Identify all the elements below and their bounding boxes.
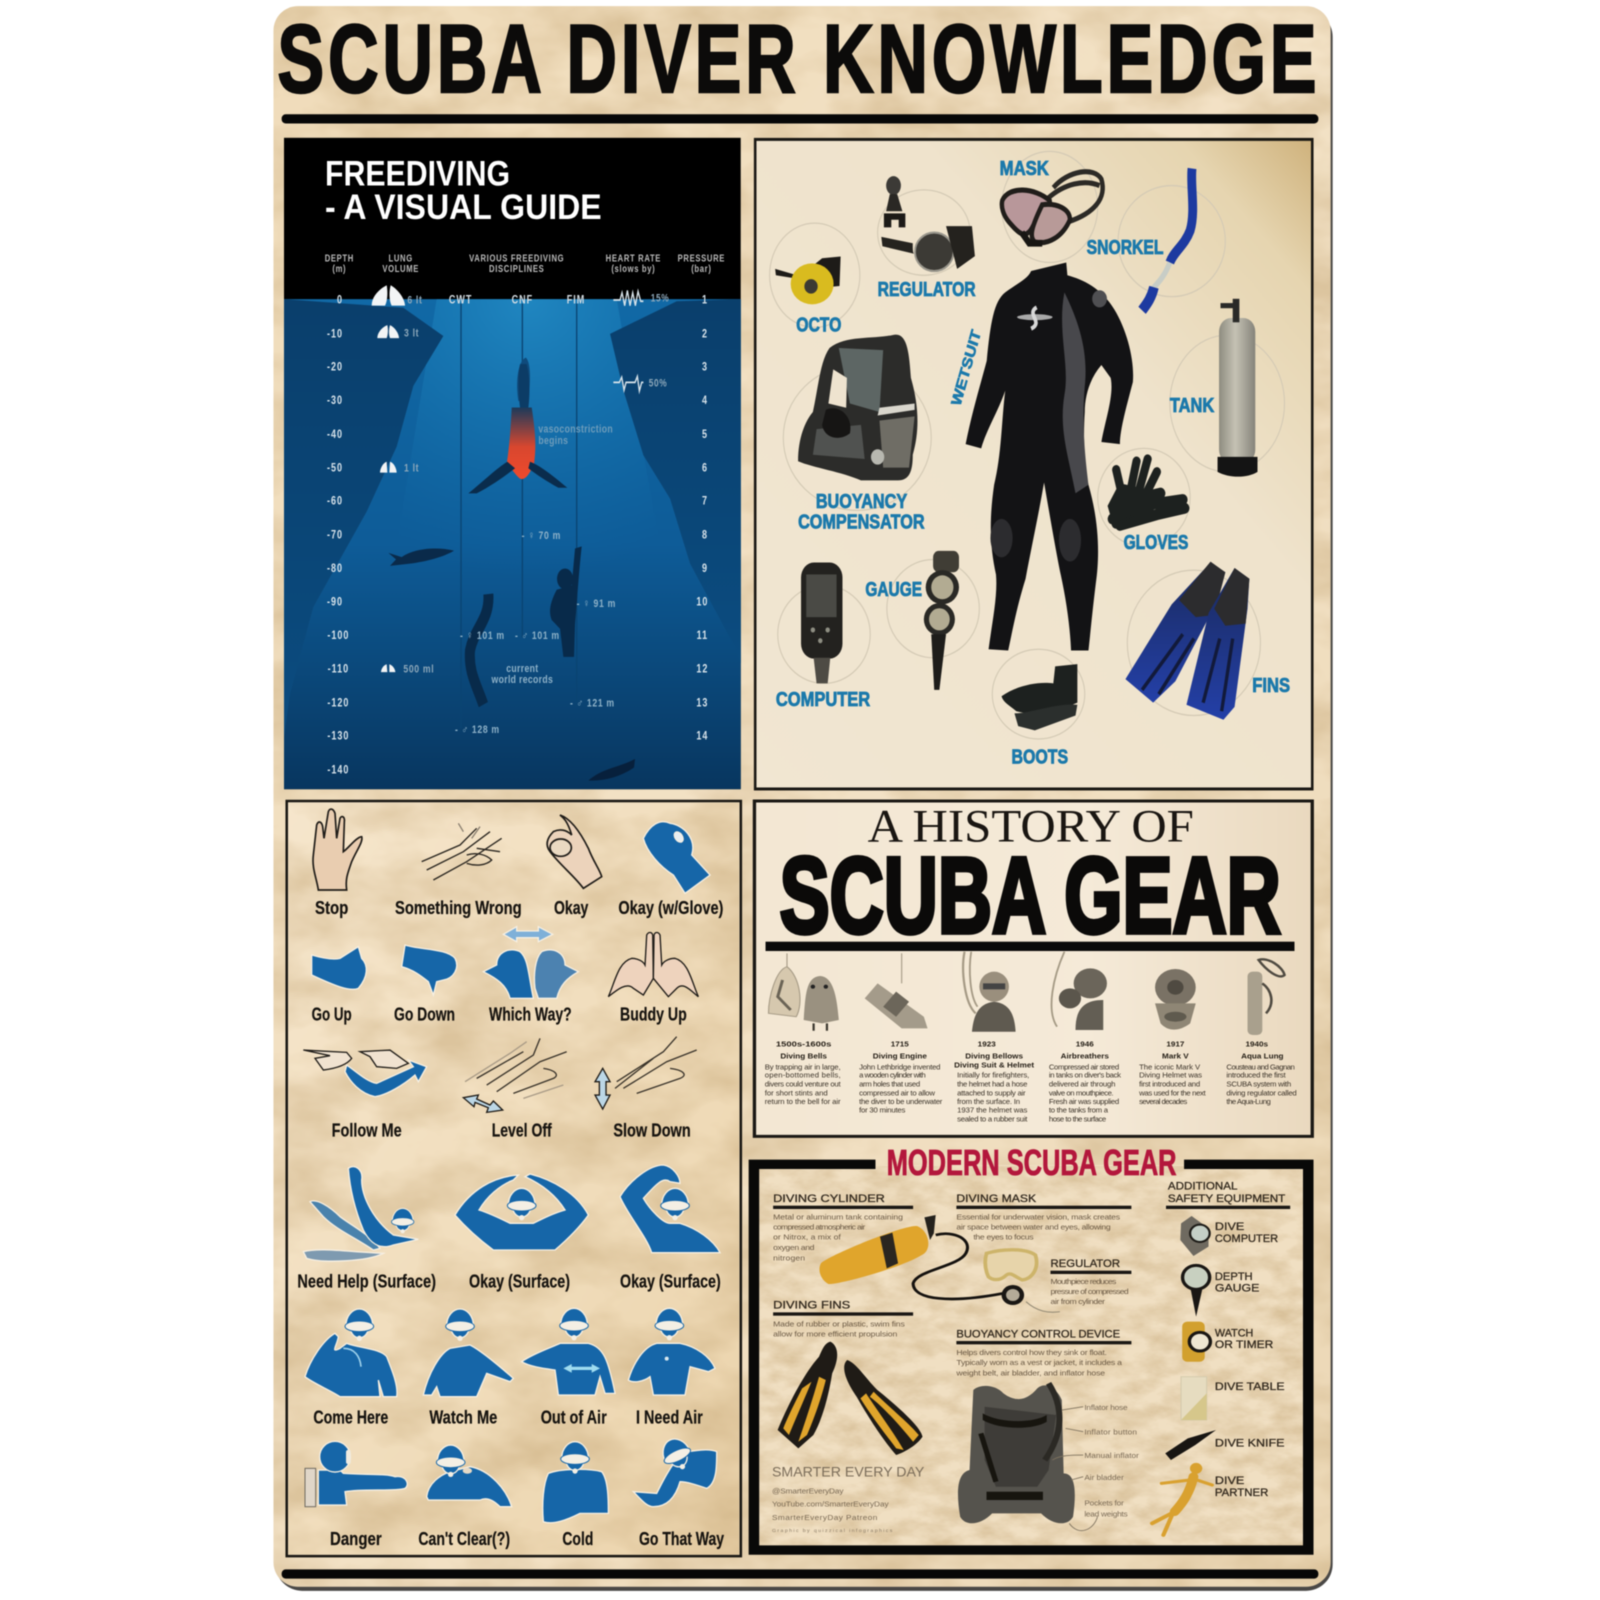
heart rate traces bbox=[613, 290, 643, 391]
caption text: mark v: first introduced and bbox=[1139, 1080, 1200, 1089]
labels: Slow Down bbox=[613, 1121, 691, 1141]
buoyancy compensator bbox=[798, 335, 917, 480]
caption text: aqualung bbox=[1226, 1063, 1297, 1106]
captions: Diving Engine bbox=[873, 1052, 928, 1061]
vest callouts: lead weights bbox=[1084, 1510, 1128, 1518]
icon: dive partner: PARTNER bbox=[1215, 1487, 1268, 1499]
depth scale: -10 bbox=[327, 328, 343, 341]
icon: depth gauge bbox=[1183, 1265, 1260, 1317]
icon: dive knife bbox=[1165, 1430, 1285, 1460]
column headers: VOLUME bbox=[382, 263, 419, 274]
signals row 1-3 bbox=[303, 809, 723, 1141]
captions: Airbreathers bbox=[1061, 1052, 1109, 1061]
pressure scale bbox=[696, 294, 708, 743]
icon: watch bbox=[1182, 1322, 1273, 1362]
records: - ♀ 101 m bbox=[460, 630, 505, 642]
icon: fins bbox=[778, 1342, 923, 1455]
faint item circles bbox=[770, 151, 1285, 739]
section: buoyancy control device: Helps divers control how they sink or float. bbox=[956, 1348, 1107, 1357]
tank bbox=[1218, 299, 1258, 477]
regulator bbox=[881, 176, 975, 271]
pressure scale: 7 bbox=[702, 496, 708, 508]
labels: Okay bbox=[554, 898, 588, 918]
labels: Out of Air bbox=[541, 1407, 607, 1427]
caption text: helmet: Initially for firefighters, bbox=[957, 1071, 1029, 1080]
lung volume labels: 500 ml bbox=[403, 664, 434, 676]
section: diving mask: the eyes to focus bbox=[973, 1233, 1034, 1242]
labels: Can't Clear(?) bbox=[418, 1529, 510, 1549]
equipment labels: OCTO bbox=[796, 315, 841, 337]
panel: hand signals bbox=[287, 801, 741, 1556]
panel: modern scuba gear bbox=[754, 1143, 1308, 1550]
gloves bbox=[1109, 459, 1185, 525]
column headers: DEPTH bbox=[325, 252, 354, 264]
captions bbox=[776, 1040, 1284, 1070]
world records note bbox=[491, 663, 553, 686]
captions: Diving Bellows bbox=[965, 1052, 1023, 1061]
figure: go that way bbox=[633, 1434, 717, 1507]
caption text: aqualung: Cousteau and Gagnan bbox=[1226, 1063, 1295, 1071]
caption text: bells: By trapping air in large, bbox=[765, 1063, 841, 1071]
labels: Okay (w/Glove) bbox=[618, 898, 723, 918]
captions: Mark V bbox=[1162, 1052, 1190, 1061]
labels: Which Way? bbox=[489, 1005, 572, 1025]
captions: 1715 bbox=[891, 1040, 910, 1049]
icon: dive computer: COMPUTER bbox=[1215, 1233, 1278, 1245]
section: buoyancy control device: BUOYANCY CONTROL DEVICE bbox=[956, 1328, 1120, 1340]
column headers: (m) bbox=[332, 263, 346, 274]
hand: which way bbox=[483, 927, 578, 998]
icon: dive knife: DIVE KNIFE bbox=[1215, 1437, 1285, 1450]
depth scale: -120 bbox=[327, 697, 349, 710]
icon: dive partner bbox=[1152, 1463, 1268, 1535]
records: - ♂ 121 m bbox=[570, 697, 615, 710]
lung volume labels: 6 lt bbox=[407, 294, 423, 307]
captions: Aqua Lung bbox=[1241, 1052, 1284, 1061]
depth scale: 0 bbox=[337, 294, 343, 307]
records: - ♂ 101 m bbox=[515, 630, 560, 642]
sign background bbox=[273, 6, 1331, 1587]
equipment labels: REGULATOR bbox=[878, 279, 976, 301]
figure: i need air bbox=[628, 1308, 715, 1395]
depth scale: -140 bbox=[327, 765, 349, 777]
boots bbox=[1002, 664, 1077, 730]
lung icons bbox=[372, 285, 405, 672]
footer: smarter every day: SMARTER EVERY DAY bbox=[772, 1465, 924, 1480]
heart rate labels: 50% bbox=[649, 378, 667, 390]
pressure scale: 2 bbox=[702, 328, 708, 341]
section: regulator: air from cylinder bbox=[1050, 1297, 1105, 1306]
caption text: aqualung: SCUBA system with bbox=[1226, 1080, 1291, 1089]
caption text: bells bbox=[765, 1063, 841, 1106]
icon: dive computer: DIVE bbox=[1215, 1221, 1244, 1233]
labels: Go Up bbox=[312, 1005, 352, 1025]
caption text: engine: arm holes that used bbox=[859, 1080, 920, 1089]
figure: need help bbox=[303, 1167, 418, 1261]
depth scale: -60 bbox=[327, 496, 343, 508]
equipment labels bbox=[776, 158, 1290, 769]
caption text: bells: open-bottomed bells, bbox=[765, 1071, 841, 1080]
right rock bbox=[610, 299, 741, 663]
equipment labels: WETSUIT bbox=[948, 327, 984, 408]
depth scale bbox=[327, 294, 349, 777]
section: buoyancy control device: Typically worn as a vest or jacket, it includes a bbox=[956, 1358, 1122, 1367]
section: diving fins bbox=[773, 1299, 913, 1339]
equipment labels: COMPUTER bbox=[776, 689, 870, 711]
hand: okay bbox=[547, 815, 602, 888]
vest callouts: Air bladder bbox=[1084, 1473, 1124, 1482]
pressure scale: 4 bbox=[702, 395, 708, 407]
pressure scale: 12 bbox=[696, 664, 708, 676]
caption text: aqualung: introduced the first bbox=[1226, 1071, 1286, 1080]
equipment labels: BOOTS bbox=[1012, 746, 1068, 769]
light beam bbox=[387, 299, 670, 607]
section: diving fins: DIVING FINS bbox=[773, 1299, 850, 1311]
infographic poster bbox=[272, 6, 1334, 1592]
caption text: airbreathers: valve on mouthpiece. bbox=[1049, 1089, 1114, 1097]
equipment labels: SNORKEL bbox=[1087, 237, 1164, 259]
equipment labels: BUOYANCY bbox=[816, 491, 907, 514]
section: diving cylinder: nitrogen bbox=[773, 1254, 805, 1262]
pressure scale: 14 bbox=[696, 731, 708, 743]
footer: smarter every day: @SmarterEveryDay bbox=[772, 1487, 844, 1495]
caption text: helmet: the helmet had a hose bbox=[957, 1080, 1027, 1089]
icon: depth gauge: DEPTH bbox=[1215, 1271, 1253, 1283]
heading: scuba gear: SCUBA GEAR bbox=[780, 836, 1281, 956]
deep fish bbox=[588, 759, 635, 781]
icon: dive table: DIVE TABLE bbox=[1215, 1381, 1285, 1393]
figure: cant clear bbox=[427, 1445, 512, 1507]
icon: diving bell bbox=[768, 953, 839, 1031]
labels: Okay (Surface) bbox=[620, 1272, 721, 1292]
column headers: VARIOUS FREEDIVING bbox=[469, 252, 564, 264]
section: diving fins: allow for more efficient propulsion bbox=[773, 1330, 897, 1339]
icon: watch: WATCH bbox=[1215, 1327, 1253, 1339]
equipment labels: MASK bbox=[1000, 158, 1049, 180]
column headers: (slows by) bbox=[611, 263, 655, 274]
column headers: PRESSURE bbox=[678, 252, 725, 264]
central diver bbox=[468, 358, 567, 493]
caption text: airbreathers: to the tanks from a bbox=[1049, 1106, 1109, 1115]
section: buoyancy control device bbox=[955, 1328, 1131, 1378]
discipline ropes bbox=[461, 303, 577, 728]
footer: smarter every day bbox=[772, 1465, 924, 1534]
section: additional safety equipment: SAFETY EQUIPMENT bbox=[1168, 1193, 1285, 1205]
section: regulator: pressure of compressed bbox=[1050, 1287, 1129, 1296]
labels: Go That Way bbox=[639, 1529, 724, 1549]
pressure scale: 3 bbox=[702, 362, 708, 374]
section: buoyancy control device: weight belt, air bladder, and inflator hose bbox=[955, 1369, 1106, 1378]
footer: smarter every day: Graphic by quizzical infographics bbox=[772, 1528, 893, 1534]
hand: go up bbox=[312, 947, 366, 989]
section: regulator: Mouthpiece reduces bbox=[1050, 1277, 1116, 1286]
captions: 1500s-1600s bbox=[776, 1040, 831, 1049]
vasoconstriction label: begins bbox=[538, 435, 568, 447]
equipment labels: COMPENSATOR bbox=[798, 511, 925, 534]
captions: Diving Suit & Helmet bbox=[954, 1061, 1035, 1070]
column headers: (bar) bbox=[691, 263, 712, 274]
icon: dive table bbox=[1181, 1377, 1285, 1420]
left rock bbox=[284, 299, 443, 737]
hand: slow down bbox=[595, 1037, 697, 1109]
labels: Okay (Surface) bbox=[469, 1272, 570, 1292]
depth scale: -90 bbox=[327, 597, 343, 609]
caption text: airbreathers: delivered air through bbox=[1049, 1080, 1115, 1089]
depth scale: -40 bbox=[327, 429, 343, 441]
vest callouts: Manual inflator bbox=[1084, 1451, 1139, 1460]
section: diving mask: DIVING MASK bbox=[956, 1193, 1036, 1205]
heart rate labels bbox=[649, 293, 669, 390]
vasoconstriction label: vasoconstriction bbox=[538, 424, 613, 436]
depth scale: -50 bbox=[327, 462, 343, 475]
caption text: aqualung: the Aqua-Lung bbox=[1226, 1097, 1271, 1106]
fins bbox=[1125, 562, 1249, 720]
pressure scale: 11 bbox=[697, 630, 708, 642]
ascending diver bbox=[550, 546, 582, 657]
heading: FREEDIVING bbox=[325, 153, 510, 193]
caption text: airbreathers: in tanks on diver's back bbox=[1049, 1071, 1121, 1080]
heading: a history of: A HISTORY OF bbox=[868, 800, 1194, 852]
vest callouts: Inflator hose bbox=[1084, 1403, 1128, 1412]
depth scale: -20 bbox=[327, 362, 343, 374]
title rule bbox=[282, 114, 1318, 123]
caption text: engine: a wooden cylinder with bbox=[859, 1071, 926, 1080]
pressure scale: 9 bbox=[702, 563, 708, 575]
pressure scale: 6 bbox=[702, 462, 708, 475]
labels: Watch Me bbox=[429, 1407, 497, 1427]
thick frame bbox=[754, 1164, 1308, 1550]
world records note: world records bbox=[491, 674, 553, 686]
labels: Follow Me bbox=[332, 1121, 402, 1141]
hand: go down bbox=[402, 945, 457, 995]
caption text: mark v bbox=[1138, 1063, 1206, 1106]
captions: 1946 bbox=[1076, 1040, 1095, 1049]
icon: depth gauge: GAUGE bbox=[1215, 1282, 1260, 1294]
caption text: airbreathers bbox=[1049, 1063, 1121, 1124]
hand: follow me bbox=[303, 1050, 427, 1097]
section: diving cylinder: Metal or aluminum tank containing bbox=[773, 1213, 903, 1221]
pressure scale: 13 bbox=[696, 697, 708, 710]
footer: smarter every day: YouTube.com/SmarterEveryDay bbox=[772, 1500, 889, 1509]
figure: out of air bbox=[522, 1308, 615, 1395]
heart rate labels: 15% bbox=[651, 293, 669, 305]
labels: Come Here bbox=[313, 1407, 388, 1427]
depth scale: -130 bbox=[327, 731, 349, 743]
depth scale: -110 bbox=[328, 664, 349, 676]
section: diving mask: Essential for underwater vision, mask creates bbox=[956, 1213, 1120, 1221]
labels: Buddy Up bbox=[620, 1005, 687, 1025]
hand: stop bbox=[313, 809, 362, 890]
lung volume labels bbox=[403, 294, 434, 676]
column headers: HEART RATE bbox=[606, 252, 661, 264]
records: - ♀ 91 m bbox=[577, 598, 616, 610]
world records note: current bbox=[506, 663, 539, 675]
panel: freediving visual guide bbox=[284, 138, 741, 789]
labels: Something Wrong bbox=[395, 898, 522, 918]
pressure scale: 5 bbox=[702, 429, 708, 441]
column headers: DISCIPLINES bbox=[489, 263, 544, 274]
figure: come here bbox=[305, 1309, 397, 1397]
hand: buddy up bbox=[608, 933, 698, 997]
icon: dive computer bbox=[1180, 1216, 1278, 1256]
wetsuit bbox=[966, 262, 1133, 651]
section: diving cylinder: oxygen and bbox=[773, 1243, 815, 1252]
heading: MODERN SCUBA GEAR bbox=[887, 1143, 1177, 1183]
icon: helmet diver bbox=[963, 952, 1016, 1032]
lung volume labels: 1 lt bbox=[404, 462, 419, 475]
mask bbox=[1002, 172, 1103, 243]
vasoconstriction label bbox=[538, 424, 613, 447]
heading bbox=[325, 153, 602, 227]
caption text: airbreathers: Compressed air stored bbox=[1049, 1063, 1119, 1071]
labels: Stop bbox=[315, 898, 348, 918]
hand: something wrong bbox=[422, 823, 502, 880]
equipment labels: GAUGE bbox=[865, 579, 922, 601]
column headers bbox=[325, 252, 725, 274]
section: diving fins: Made of rubber or plastic, swim fins bbox=[773, 1320, 905, 1329]
records bbox=[455, 530, 616, 736]
discipline labels: FIM bbox=[567, 294, 585, 307]
figure: okay surface both arms bbox=[455, 1174, 588, 1250]
caption text: helmet: 1937 the helmet was bbox=[957, 1106, 1028, 1115]
figure: okay surface one arm bbox=[620, 1165, 720, 1253]
equipment labels: TANK bbox=[1170, 395, 1214, 417]
labels bbox=[312, 898, 723, 1141]
discipline labels: CWT bbox=[449, 294, 472, 307]
caption text: bells: return to the bell for air bbox=[765, 1097, 841, 1106]
footer: smarter every day: SmarterEveryDay Patreon bbox=[772, 1513, 877, 1522]
captions: 1923 bbox=[978, 1040, 996, 1049]
caption text: airbreathers: hose to the surface bbox=[1049, 1115, 1106, 1124]
fish bbox=[388, 548, 454, 566]
heading: - A VISUAL GUIDE bbox=[325, 186, 602, 227]
labels: I Need Air bbox=[636, 1407, 703, 1427]
caption text: helmet bbox=[957, 1071, 1029, 1124]
caption text: engine bbox=[859, 1063, 943, 1115]
labels bbox=[297, 1272, 724, 1549]
section: regulator: REGULATOR bbox=[1050, 1258, 1120, 1270]
caption text: engine: compressed air to allow bbox=[859, 1089, 936, 1097]
sign shadow bbox=[276, 10, 1333, 1591]
section: diving cylinder: DIVING CYLINDER bbox=[773, 1193, 885, 1205]
icon: yellow mask bbox=[985, 1250, 1037, 1280]
section: additional safety equipment: ADDITIONAL bbox=[1168, 1180, 1238, 1192]
icon: airpack bbox=[1052, 952, 1107, 1030]
hand: okay glove bbox=[643, 822, 710, 893]
labels: Go Down bbox=[394, 1005, 455, 1025]
pressure scale: 10 bbox=[696, 597, 708, 609]
icon: dive partner: DIVE bbox=[1215, 1475, 1244, 1487]
freediver with monofin bbox=[470, 594, 488, 705]
caption text: bells: divers could venture out bbox=[765, 1080, 841, 1089]
vest callouts bbox=[1052, 1403, 1139, 1531]
section: regulator bbox=[1026, 1258, 1131, 1312]
depth scale: -70 bbox=[327, 530, 343, 542]
section: diving cylinder bbox=[773, 1193, 913, 1262]
section: diving cylinder: compressed atmospheric air bbox=[773, 1223, 866, 1231]
lung volume labels: 3 lt bbox=[404, 327, 419, 340]
caption text: aqualung: diving regulator called bbox=[1226, 1089, 1297, 1097]
icon: mark v helmet bbox=[1155, 969, 1196, 1030]
hand: level off bbox=[463, 1038, 567, 1112]
depth scale: -100 bbox=[327, 630, 349, 642]
computer bbox=[801, 562, 842, 683]
caption text: engine: the diver to be underwater bbox=[859, 1097, 943, 1106]
snorkel bbox=[1142, 168, 1193, 310]
icon: aqualung bbox=[1248, 959, 1285, 1035]
figure: danger bbox=[305, 1441, 407, 1507]
section: diving mask bbox=[956, 1193, 1131, 1242]
octo bbox=[775, 256, 841, 304]
captions: 1917 bbox=[1166, 1040, 1184, 1049]
section: diving mask: air space between water and eyes, allowing bbox=[956, 1223, 1111, 1231]
column headers: LUNG bbox=[389, 252, 413, 264]
caption text: helmet: sealed to a rubber suit bbox=[957, 1115, 1027, 1124]
icon: watch: OR TIMER bbox=[1215, 1339, 1273, 1351]
pressure scale: 1 bbox=[702, 294, 708, 307]
labels: Level Off bbox=[492, 1121, 552, 1141]
title: SCUBA DIVER KNOWLEDGE bbox=[278, 5, 1316, 112]
records: - ♂ 128 m bbox=[455, 724, 500, 736]
caption text: mark v: several decades bbox=[1139, 1097, 1188, 1106]
discipline labels bbox=[449, 294, 585, 307]
panel: history of scuba gear bbox=[754, 800, 1312, 1136]
caption text: mark v: was used for the next bbox=[1138, 1089, 1206, 1097]
panel: gear diagram bbox=[755, 139, 1312, 789]
captions: Diving Bells bbox=[780, 1052, 827, 1061]
section: additional safety equipment bbox=[1166, 1180, 1290, 1209]
caption text: bells: for short stints and bbox=[765, 1089, 828, 1097]
caption text: airbreathers: Fresh air was supplied bbox=[1049, 1097, 1119, 1106]
vest callouts: Inflator button bbox=[1084, 1428, 1137, 1437]
labels: Cold bbox=[562, 1529, 593, 1549]
labels: Need Help (Surface) bbox=[297, 1272, 436, 1292]
icon: cylinder and hose bbox=[819, 1215, 1024, 1305]
caption text: helmet: from the surface. In bbox=[957, 1097, 1020, 1106]
caption text: engine: for 30 minutes bbox=[859, 1106, 906, 1115]
heading rule bbox=[766, 942, 1294, 951]
section: diving cylinder: or Nitrox, a mix of bbox=[773, 1233, 842, 1242]
labels: Danger bbox=[330, 1529, 382, 1549]
icon: buoyancy control vest bbox=[958, 1383, 1075, 1523]
depth scale: -30 bbox=[327, 395, 343, 407]
signals row 4-6 bbox=[297, 1165, 724, 1549]
figure: watch me bbox=[423, 1309, 513, 1397]
icon: diving barrel bbox=[865, 953, 928, 1028]
pressure scale: 8 bbox=[702, 530, 708, 542]
equipment labels: FINS bbox=[1252, 675, 1290, 697]
gauge bbox=[924, 551, 959, 690]
bottom rule bbox=[282, 1569, 1318, 1579]
captions: 1940s bbox=[1245, 1040, 1268, 1049]
caption text: helmet: attached to supply air bbox=[957, 1089, 1026, 1097]
caption text: mark v: The iconic Mark V bbox=[1139, 1063, 1200, 1071]
figure: cold bbox=[543, 1442, 608, 1523]
caption text: mark v: Diving Helmet was bbox=[1139, 1071, 1202, 1080]
records: - ♀ 70 m bbox=[522, 530, 561, 542]
depth scale: -80 bbox=[327, 563, 343, 575]
equipment labels: GLOVES bbox=[1124, 532, 1188, 554]
vest callouts: Pockets for bbox=[1084, 1499, 1124, 1508]
discipline labels: CNF bbox=[512, 294, 533, 307]
caption text: engine: John Lethbridge invented bbox=[859, 1063, 940, 1071]
